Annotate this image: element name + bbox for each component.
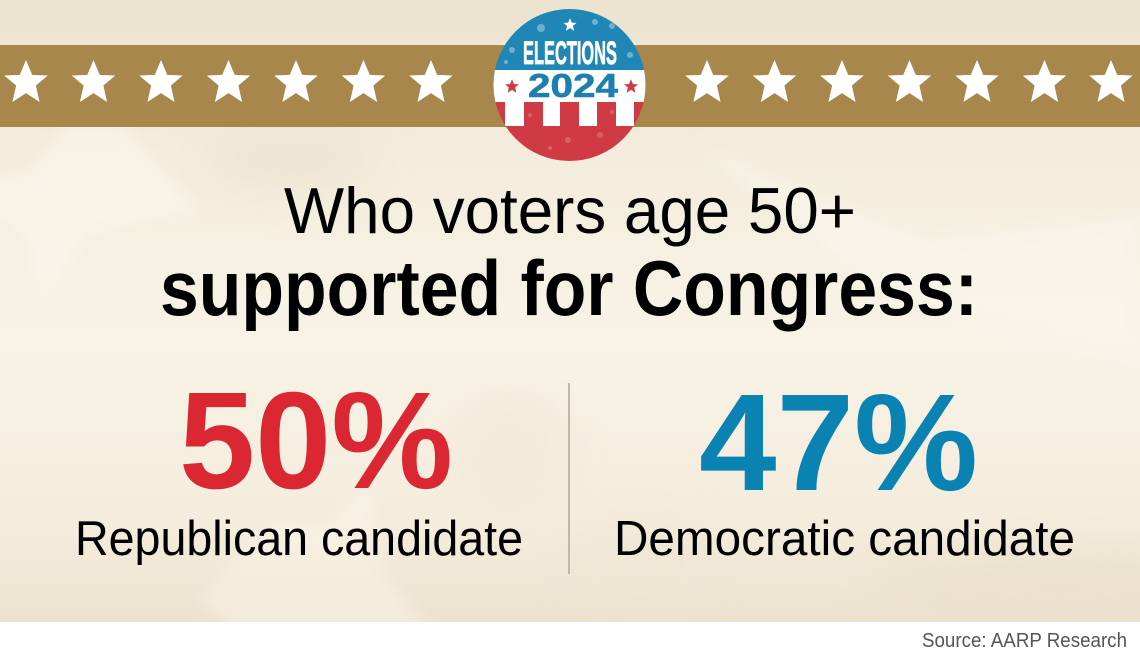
- source note: Source: AARP Research: [922, 630, 1127, 652]
- title line 2: supported for Congress:: [160, 244, 978, 332]
- stat: Democratic 47%: 47%: [699, 366, 978, 520]
- divider: [568, 383, 570, 574]
- icon: Elections 2024 badge: 2024: [528, 67, 619, 104]
- icon: Elections 2024 badge: [490, 5, 650, 162]
- gold banner: [0, 45, 1140, 127]
- icon: Elections 2024 badge: ELECTIONS: [523, 35, 617, 71]
- label: Democratic candidate: Democratic candidate: [614, 512, 1075, 566]
- left row of stars: [4, 60, 453, 102]
- title line 1: Who voters age 50+: [284, 174, 856, 247]
- right row of stars: [685, 60, 1133, 102]
- label: Republican candidate: Republican candidate: [75, 512, 523, 566]
- stat: Republican 50%: 50%: [179, 364, 453, 518]
